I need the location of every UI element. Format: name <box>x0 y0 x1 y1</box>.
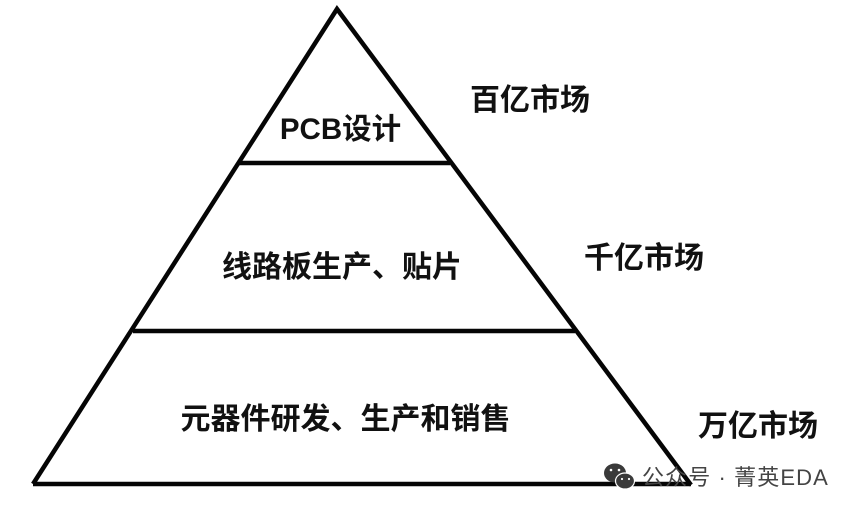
tier label: PCB design: PCB设计 <box>280 113 401 146</box>
market label: thousand-scale tier: 千亿市场 <box>584 242 704 275</box>
watermark text: 公众号 · 菁英EDA <box>642 465 829 490</box>
market label: ten-thousand-scale tier: 万亿市场 <box>698 410 818 443</box>
market label: hundred billion: 百亿市场 <box>470 84 590 117</box>
tier label: board production and assembly: 线路板生产、贴片 <box>222 251 462 284</box>
pyramid outline <box>33 9 691 485</box>
tier label: component development, production and sales: 元器件研发、生产和销售 <box>180 403 510 436</box>
icon: wechat logo <box>604 464 634 489</box>
